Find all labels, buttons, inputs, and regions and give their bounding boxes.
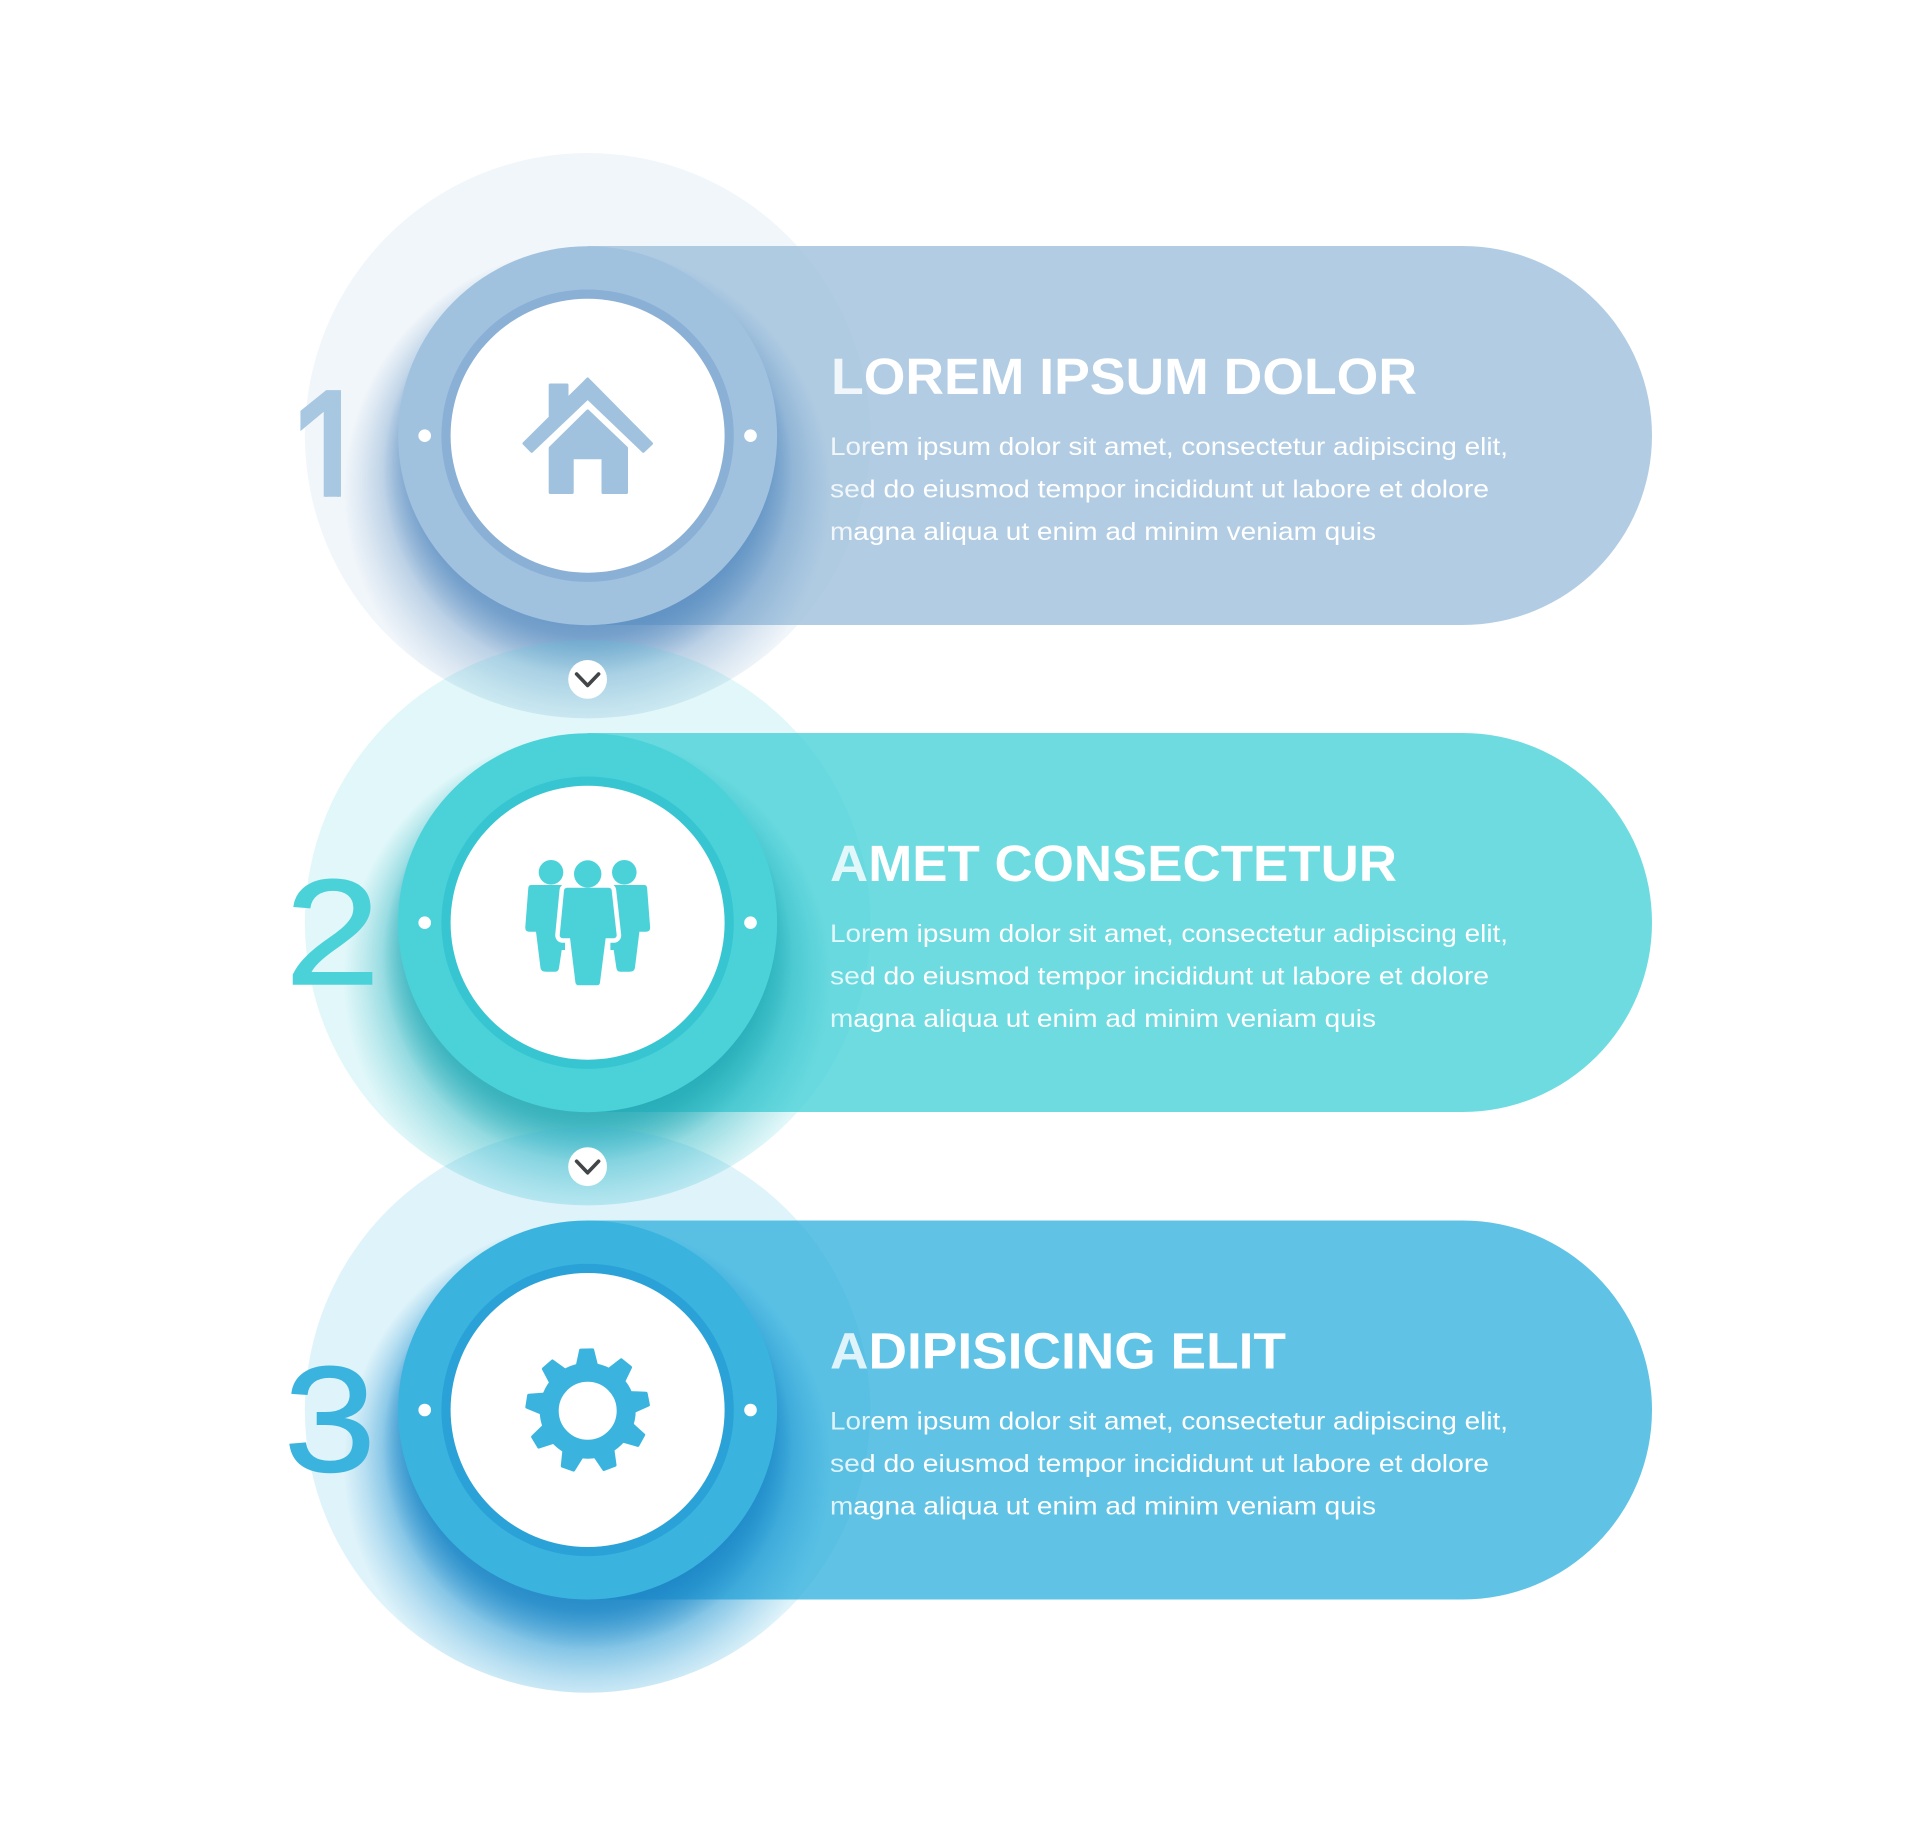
heading: step 3: ADIPISICING ELIT (830, 1322, 1286, 1379)
connector arrow: step 2 to 3 (568, 1147, 607, 1186)
body text: step 1: Lorem ipsum dolor sit amet, consectetur adipiscing elit, (830, 433, 1508, 461)
body text: step 2 (830, 920, 1508, 1033)
heading: step 2: AMET CONSECTETUR (830, 835, 1397, 892)
halo circle: step 1 (305, 153, 870, 718)
number 2: 2 (285, 849, 380, 1017)
soft shadow: step 2 (348, 753, 818, 1206)
banner pill: step 2 (588, 733, 1652, 1112)
body text: step 1: sed do eiusmod tempor incididunt ut labore et dolore (830, 476, 1489, 504)
body text: step 2: Lorem ipsum dolor sit amet, consectetur adipiscing elit, (830, 920, 1508, 948)
body text: step 3: magna aliqua ut enim ad minim veniam quis (830, 1492, 1376, 1520)
heading: step 1: LOREM IPSUM DOLOR (831, 348, 1417, 405)
halo circle: step 2 (305, 640, 870, 1205)
icon: people (525, 860, 650, 982)
icon: house (524, 379, 652, 492)
banner pill: step 3 (588, 1220, 1652, 1600)
halo circle: step 3 (305, 1127, 870, 1693)
panel: step 1 (288, 153, 1652, 736)
soft shadow: step 3 (348, 1240, 818, 1693)
body text: step 3: Lorem ipsum dolor sit amet, consectetur adipiscing elit, (830, 1407, 1508, 1435)
body text: step 2: sed do eiusmod tempor incididunt ut labore et dolore (830, 963, 1489, 991)
soft shadow: step 1 (350, 272, 820, 718)
body text: step 1: magna aliqua ut enim ad minim veniam quis (830, 518, 1376, 546)
icon: gear (526, 1350, 649, 1471)
dial: step 2 (398, 733, 777, 1112)
body text: step 2: magna aliqua ut enim ad minim veniam quis (830, 1005, 1376, 1033)
dial: step 3 (398, 1220, 777, 1600)
body text: step 3: sed do eiusmod tempor incididunt ut labore et dolore (830, 1450, 1489, 1478)
body text: step 3 (830, 1407, 1508, 1520)
panel: step 2 (285, 640, 1652, 1223)
banner pill: step 1 (588, 246, 1652, 625)
number 1: 1 (288, 354, 371, 551)
number 3: 3 (284, 1336, 376, 1503)
connector arrow: step 1 to 2 (568, 660, 607, 699)
body text: step 1 (830, 433, 1508, 546)
panel: step 3 (284, 1127, 1652, 1710)
dial: step 1 (398, 246, 777, 625)
